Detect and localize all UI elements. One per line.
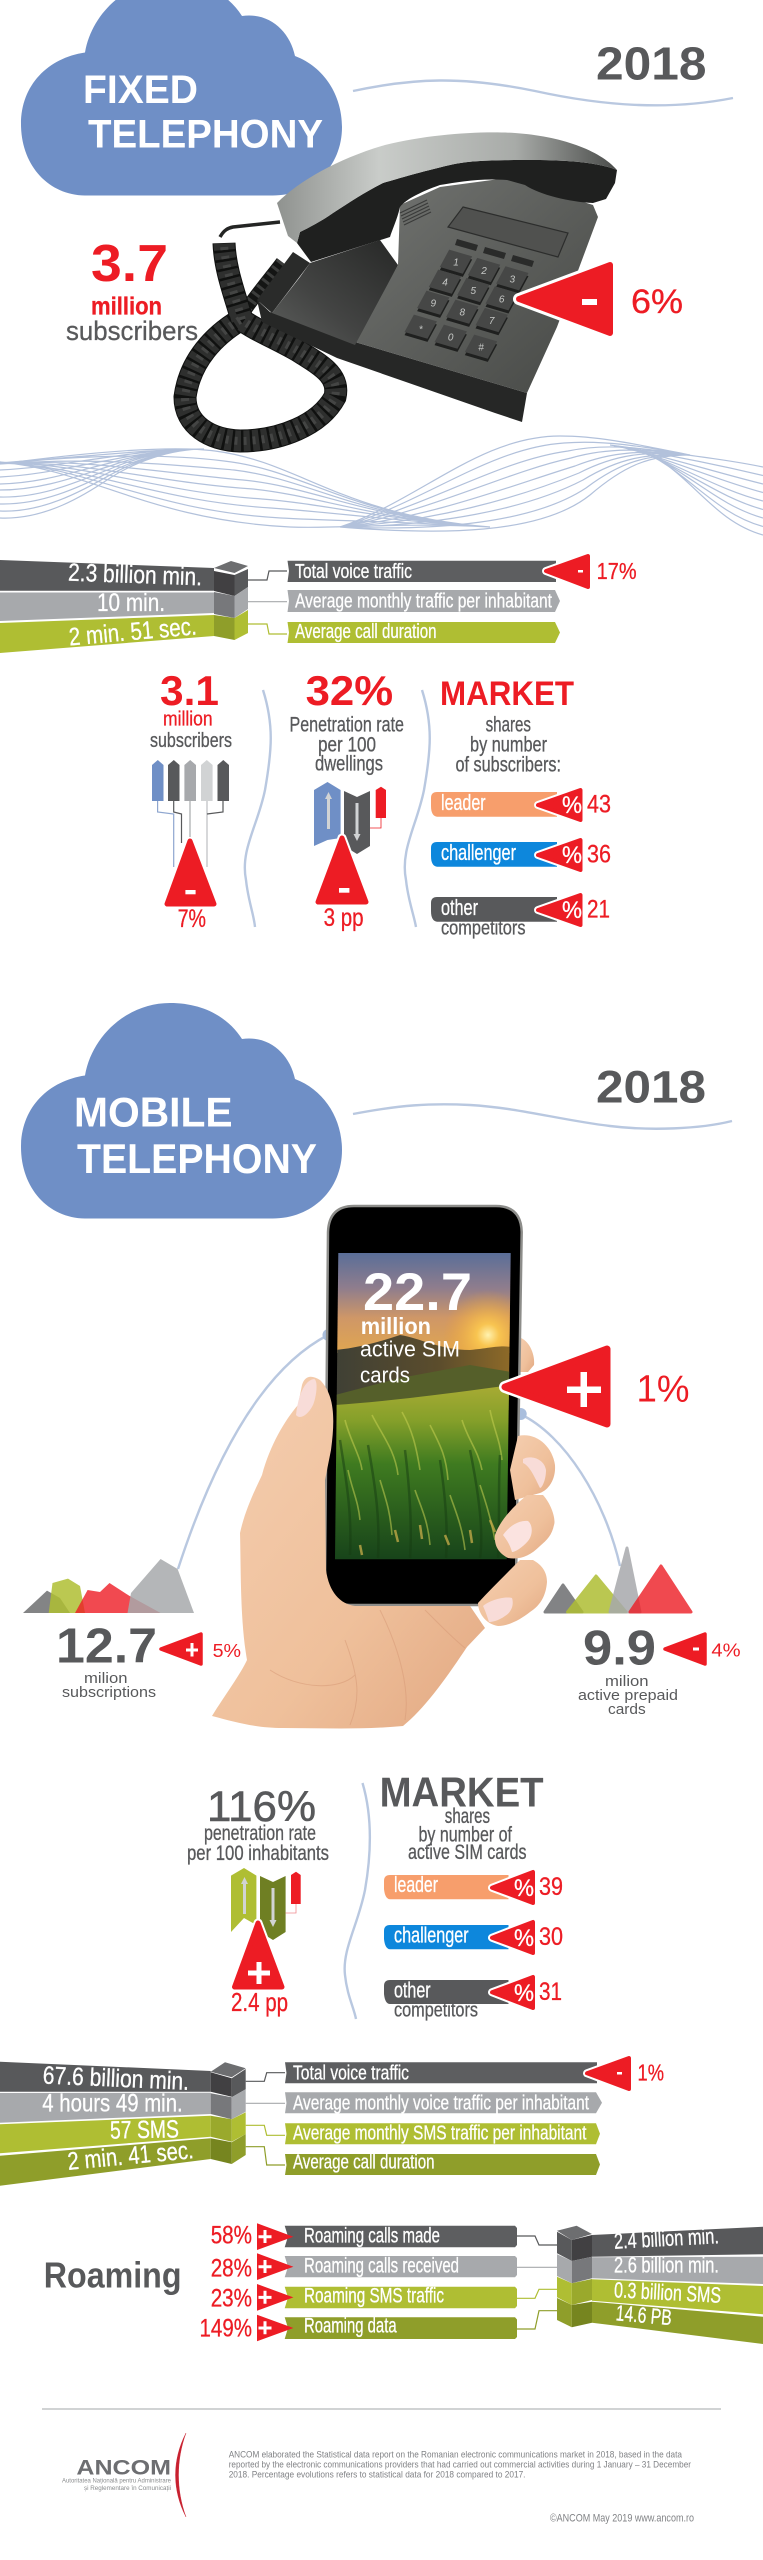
stat: 3.7 million subscribers: million (91, 292, 162, 320)
panel: mobile indicators (187, 1769, 563, 2022)
heading: mobile telephony (74, 1088, 317, 1182)
callout: minus 17 percent (546, 556, 637, 587)
illustration: hand (212, 1377, 555, 1728)
heading: market shares (440, 675, 574, 777)
market bar: other competitors 21: 21 (587, 896, 610, 924)
3D stacked bars: 2.4 billion min. (613, 2223, 719, 2254)
market bar: other competitors 21: other (441, 895, 478, 920)
3D stacked bars: 14.6 PB (615, 2300, 673, 2330)
3D stacked bars (557, 2223, 763, 2344)
stat: 9.9 million active prepaid cards: 9.9 (583, 1621, 656, 1675)
heading: fixed telephony: TELEPHONY (88, 112, 323, 156)
row: roaming data: 149% (200, 2315, 252, 2343)
logo: ANCOM: ANCOM (76, 2456, 171, 2479)
label: average call duration (285, 2152, 600, 2175)
market bar: leader 43 (431, 790, 611, 820)
label: average monthly traffic: Average monthly traffic per inhabitant (295, 591, 552, 613)
heading: fixed telephony (83, 68, 323, 156)
connector: to subscriptions (178, 1329, 334, 1569)
market bar: other competitors 31 (384, 1977, 562, 2022)
row: roaming calls received: 28% (211, 2255, 252, 2283)
row: roaming sms traffic: Roaming SMS traffic (304, 2285, 444, 2308)
divider (405, 690, 430, 927)
stat: 9.9 million active prepaid cards: active prepaid (578, 1687, 678, 1704)
market bar: leader 43: % (562, 792, 582, 819)
label: average call duration (288, 621, 560, 643)
icon: red triangle minus 7 percent: 7% (178, 905, 206, 933)
3D stacked bars: 2 min. 51 sec. (68, 612, 198, 652)
stat: 9.9 million active prepaid cards (578, 1621, 741, 1718)
keypad: * (419, 325, 424, 336)
divider (245, 690, 271, 927)
stat: 32 percent penetration: dwellings (315, 752, 383, 776)
keypad: 3 (510, 274, 516, 285)
stat: 9.9 million active prepaid cards: cards (608, 1701, 646, 1718)
label: average call duration: Average call duration (293, 2152, 434, 2174)
row: roaming calls made: 58% (211, 2221, 252, 2249)
stat: 116 percent penetration (187, 1783, 329, 1865)
text block: methodology note: reported by the electronic communications providers that had carried out commercial activities during 1 January – 31 December (229, 2460, 691, 2470)
stat: 116 percent penetration: 116% (207, 1783, 316, 1831)
panel: mobile traffic bars (0, 2058, 664, 2186)
stat: 22.7 million active SIM cards (360, 1263, 472, 1388)
stat: 3.1 million subscribers: 3.1 (160, 667, 219, 714)
keypad: 5 (471, 286, 477, 297)
stat: 32 percent penetration (290, 667, 404, 776)
callout: minus 1 percent: 1% (638, 2060, 664, 2086)
thumb nail (296, 1379, 317, 1417)
market bar: other competitors 31: % (514, 1980, 534, 2007)
heading: market shares (380, 1769, 544, 1864)
heading: market shares: MARKET (380, 1769, 544, 1816)
row: roaming calls made (211, 2221, 517, 2250)
3D stacked bars: 2.3 billion min. (68, 559, 203, 591)
icon: up and down flags (231, 1868, 301, 1940)
stat: 116 percent penetration: per 100 inhabitants (187, 1842, 329, 1865)
keypad: 4 (442, 278, 448, 289)
cloud: fixed telephony (21, 0, 342, 196)
row: roaming sms traffic (211, 2284, 517, 2313)
stat: 9.9 million active prepaid cards: milion (605, 1673, 649, 1690)
wave divider (353, 80, 733, 105)
icon: red triangle minus 3 pp (318, 838, 366, 932)
stat: 32 percent penetration: Penetration rate (290, 714, 404, 737)
stat: 116 percent penetration: penetration rate (204, 1822, 316, 1845)
stat: 3.7 million subscribers (66, 235, 198, 346)
market bar: challenger 30 (384, 1922, 563, 1953)
market bar: challenger 30: challenger (394, 1923, 469, 1948)
callout: plus 1 percent: 1% (636, 1369, 690, 1411)
callout: minus 6 percent: 6% (631, 283, 683, 321)
row: roaming calls received (211, 2253, 517, 2283)
label: total voice traffic: Total voice traffic (293, 2062, 409, 2084)
callout: minus 17 percent: 17% (597, 558, 637, 584)
market bar: challenger 36: % (562, 842, 582, 869)
illustration: desk telephone (257, 132, 617, 422)
stat: 32 percent penetration: 32% (306, 667, 393, 714)
callout: plus 1 percent (505, 1349, 690, 1424)
stat: 22.7 million active SIM cards: cards (360, 1363, 410, 1388)
market bar: challenger 30: % (514, 1925, 534, 1952)
stat: 3.1 million subscribers: subscribers (150, 730, 232, 752)
stat: 12.7 million subscriptions (56, 1619, 241, 1701)
icon: red triangle minus 3 pp: 3 pp (324, 904, 364, 932)
illustration: coiled cord (185, 222, 336, 441)
market bar: other competitors 31: other (394, 1978, 431, 2003)
chart icon: prepaid peaks (545, 1548, 691, 1612)
heading: market shares: MARKET (440, 675, 574, 713)
keypad: 7 (489, 316, 495, 327)
row: roaming sms traffic: 23% (211, 2285, 252, 2313)
wave pattern (0, 436, 763, 535)
market bar: challenger 30: 30 (539, 1923, 563, 1951)
panel: footer (42, 2409, 721, 2525)
stat: 12.7 million subscriptions: 5% (213, 1641, 241, 1661)
logo: ANCOM: și Reglementare în Comunicații (84, 2485, 171, 2492)
keypad: 1 (453, 258, 459, 269)
keypad: 6 (499, 294, 505, 305)
panel: fixed indicators (150, 667, 611, 939)
market bar: challenger 36: challenger (441, 840, 516, 865)
stat: 32 percent penetration: per 100 (318, 734, 376, 757)
panel: fixed telephony (0, 0, 763, 535)
label: total voice traffic: Total voice traffic (295, 561, 412, 583)
text block: methodology note: ANCOM elaborated the Statistical data report on the Romanian electronic communications market in 2018, based in the data (229, 2450, 682, 2460)
keypad: 9 (431, 299, 437, 310)
icon: red triangle plus 2.4 pp: 2.4 pp (231, 1987, 288, 2017)
keypad: 2 (480, 266, 487, 277)
market bar: other competitors 21 (431, 895, 610, 939)
icon: up and down flags (314, 782, 386, 854)
3D stacked bars: 2.6 billion min. (614, 2252, 719, 2277)
heading: market shares: by number (470, 734, 547, 757)
heading: roaming: Roaming (44, 2254, 181, 2295)
stat: 9.9 million active prepaid cards: 4% (711, 1641, 741, 1661)
finger two (510, 1435, 555, 1500)
market bar: other competitors 21: % (562, 897, 582, 924)
heading: mobile telephony: TELEPHONY (77, 1135, 317, 1182)
market bar: other competitors 21: competitors (441, 917, 526, 939)
heading: mobile telephony: MOBILE (74, 1088, 233, 1136)
stat: 3.7 million subscribers: subscribers (66, 316, 198, 346)
panel: fixed telephony traffic bars (0, 556, 637, 653)
market bar: leader 43: leader (441, 790, 486, 815)
function buttons (455, 239, 534, 267)
handset (297, 160, 617, 262)
cloud: mobile telephony (21, 1003, 342, 1218)
heading: market shares: by number of (418, 1824, 512, 1847)
stat: 3.1 million subscribers (150, 667, 232, 752)
panel: roaming (44, 2221, 763, 2344)
stat: 3.1 million subscribers: million (163, 709, 213, 731)
connector lines (248, 571, 287, 634)
year 2018: 2018 (596, 1062, 706, 1112)
icon: five subscriber lines (152, 760, 229, 867)
market bar: leader 39 (384, 1872, 563, 1903)
heading: market shares: shares (486, 714, 531, 737)
finger four (478, 1560, 547, 1626)
year 2018: 2018 (596, 38, 706, 90)
panel: mobile telephony (21, 1003, 741, 1728)
finger three (495, 1495, 555, 1558)
label: average call duration: Average call duration (295, 621, 436, 643)
logo: ANCOM: Autoritatea Națională pentru Administrare (62, 2478, 171, 2485)
keypad: # (478, 343, 484, 354)
market bar: challenger 36: 36 (587, 841, 611, 869)
heading: market shares: of subscribers: (456, 754, 561, 777)
label: average monthly sms traffic: Average monthly SMS traffic per inhabitant (293, 2122, 587, 2144)
market bar: leader 39: 39 (539, 1873, 563, 1901)
connector: to prepaid cards (515, 1408, 620, 1566)
market bar: other competitors 31: competitors (394, 2000, 478, 2022)
3D stacked bars (0, 559, 248, 653)
label: total voice traffic (285, 2062, 597, 2084)
callout: minus 1 percent (587, 2058, 664, 2089)
keypad: 8 (460, 308, 466, 319)
icon: red triangle minus 7 percent (167, 841, 214, 933)
market bar: other competitors 31: 31 (539, 1978, 562, 2006)
row: roaming calls received: Roaming calls received (304, 2255, 459, 2278)
stat: 3.7 million subscribers: 3.7 (91, 235, 168, 293)
3D stacked bars: 57 SMS (110, 2115, 179, 2145)
stat: 12.7 million subscriptions: 12.7 (56, 1619, 157, 1673)
3D stacked bars (0, 2062, 246, 2186)
heading: fixed telephony: FIXED (83, 68, 198, 112)
heading: market shares: active SIM cards (408, 1841, 526, 1864)
row: roaming data (200, 2315, 517, 2343)
chart icon: subscriptions peaks (23, 1559, 194, 1613)
stat: 22.7 million active SIM cards: active SIM (360, 1337, 460, 1362)
copyright: ©ANCOM May 2019 www.ancom.ro (550, 2513, 694, 2525)
connector lines (246, 2073, 285, 2165)
market bar: challenger 36 (431, 840, 611, 870)
stat: 22.7 million active SIM cards: million (361, 1313, 431, 1339)
3D stacked bars: 4 hours 49 min. (42, 2090, 183, 2118)
phone screen landscape (335, 1253, 511, 1560)
wave divider (353, 1104, 732, 1129)
stat: 12.7 million subscriptions: subscriptions (62, 1684, 156, 1701)
divider (345, 1783, 370, 2019)
3D stacked bars: 0.3 billion SMS (614, 2277, 722, 2308)
icon: red triangle plus 2.4 pp (231, 1923, 288, 2017)
keypad: 0 (448, 333, 454, 344)
text block: methodology note: 2018. Percentage evolutions refers to statistical data for 2018 compared to 2017. (229, 2470, 525, 2480)
market bar: leader 39: % (514, 1875, 534, 1902)
row: roaming data: Roaming data (304, 2315, 397, 2338)
heading: market shares: shares (445, 1805, 490, 1828)
stat: 22.7 million active SIM cards: 22.7 (363, 1263, 472, 1322)
illustration: smartphone (325, 1206, 533, 1605)
label: average monthly voice traffic: Average monthly voice traffic per inhabitant (293, 2092, 589, 2114)
connector lines (517, 2236, 557, 2329)
callout: minus 6 percent (519, 265, 683, 333)
text block: methodology note (229, 2450, 691, 2480)
3D stacked bars: 10 min. (97, 589, 165, 617)
stat: 12.7 million subscriptions: milion (84, 1670, 128, 1687)
illustration: fingers behind phone (518, 1338, 534, 1372)
3D stacked bars: 67.6 billion min. (42, 2062, 190, 2096)
display window (448, 207, 568, 257)
logo: ANCOM (62, 2433, 186, 2517)
market bar: leader 39: leader (394, 1872, 438, 1897)
keypad (404, 250, 528, 362)
market bar: leader 43: 43 (587, 791, 611, 819)
3D stacked bars: 2 min. 41 sec. (66, 2136, 195, 2176)
label: total voice traffic (288, 561, 556, 583)
row: roaming calls made: Roaming calls made (304, 2224, 440, 2247)
